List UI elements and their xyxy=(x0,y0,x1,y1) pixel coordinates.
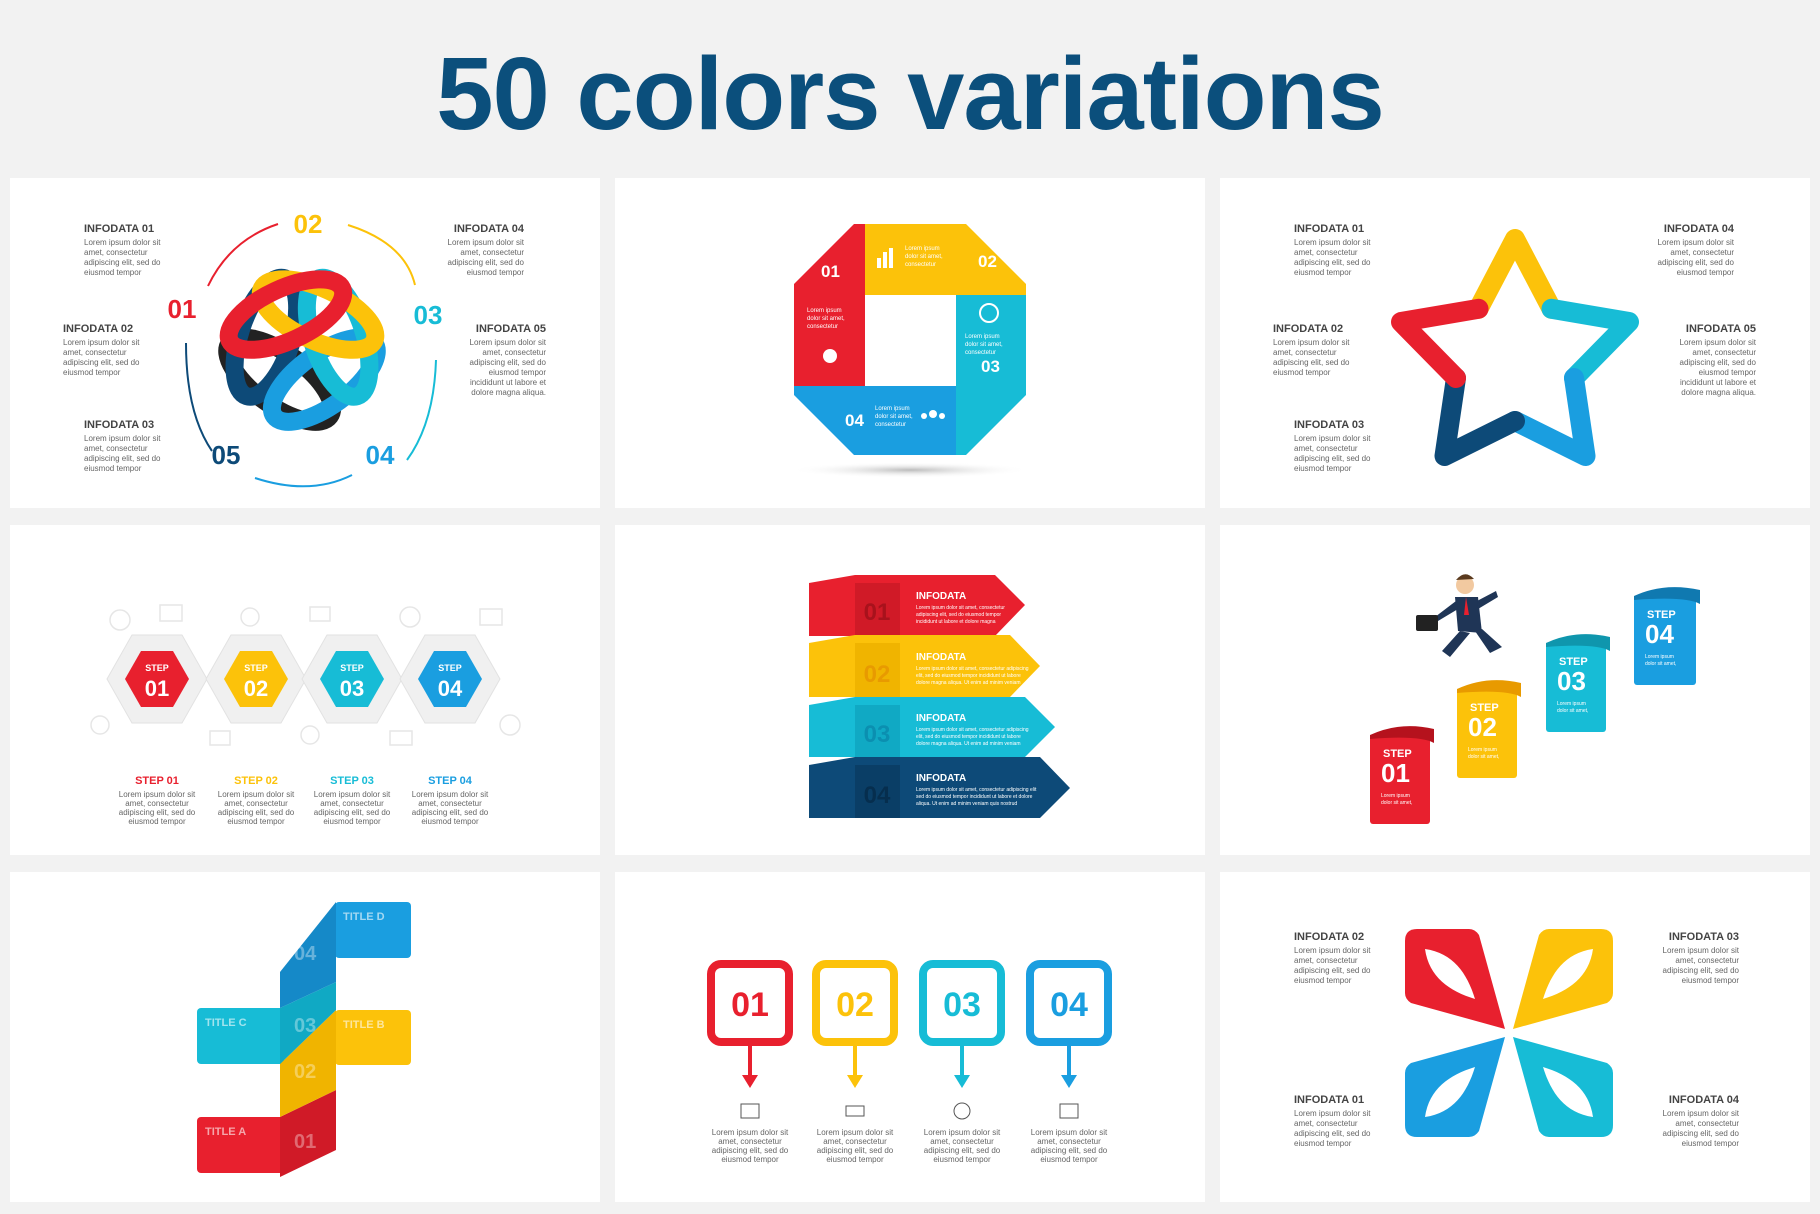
panel: ring infographic: Lorem ipsum dolor sit xyxy=(448,238,525,247)
panel: four petals: INFODATA 01 xyxy=(1294,1094,1364,1106)
hexagons: STEP xyxy=(438,663,462,673)
panel: pins: 02 xyxy=(836,986,874,1024)
hexagons: STEP xyxy=(340,663,364,673)
panel: octagon: dolor sit amet, xyxy=(965,342,1003,348)
step captions: eiusmod tempor xyxy=(128,817,186,826)
panel: pins xyxy=(615,872,1205,1202)
text blocks: Lorem ipsum dolor sit xyxy=(63,338,140,347)
panel: running man steps: 03 xyxy=(1557,666,1586,696)
panel: four petals: Lorem ipsum dolor sit xyxy=(1294,946,1371,955)
text blocks: INFODATA 03 xyxy=(84,419,154,431)
panel: 3D arrows: elit, sed do eiusmod tempor incididunt ut labore xyxy=(916,734,1021,740)
panel: star: INFODATA 02 xyxy=(1273,323,1343,335)
panel: star: amet, consectetur xyxy=(1294,248,1358,257)
hexagons: 02 xyxy=(244,676,268,701)
panel: 3D arrows: INFODATA xyxy=(916,713,966,724)
panel: pins: eiusmod tempor xyxy=(933,1155,991,1164)
panel: four petals: INFODATA 02 xyxy=(1294,931,1364,943)
panel: star: INFODATA 01 xyxy=(1294,223,1364,235)
title: 50 colors variations xyxy=(436,36,1384,151)
panel: four petals: adipiscing elit, sed do xyxy=(1294,1129,1371,1138)
panel: four petals: INFODATA 03 xyxy=(1669,931,1739,943)
panel: four petals: amet, consectetur xyxy=(1675,1119,1739,1128)
panel: ring infographic: INFODATA 05 xyxy=(476,323,546,335)
step captions: eiusmod tempor xyxy=(323,817,381,826)
panel: 3D arrows xyxy=(615,525,1205,855)
panel: pins: 03 xyxy=(943,986,981,1024)
panel: staircase titles xyxy=(10,872,600,1202)
panel: four petals: amet, consectetur xyxy=(1294,956,1358,965)
step captions: Lorem ipsum dolor sit xyxy=(314,790,391,799)
panel: running man steps: Lorem ipsum xyxy=(1381,793,1410,799)
panel: 3D arrows: dolore magna aliqua. Ut enim ad minim veniam xyxy=(916,680,1020,686)
panel: running man steps: STEP xyxy=(1383,748,1412,760)
panel: star: INFODATA 03 xyxy=(1294,419,1364,431)
step captions: amet, consectetur xyxy=(320,799,384,808)
icon: running businessman xyxy=(1416,574,1502,657)
panel: star: adipiscing elit, sed do xyxy=(1658,258,1735,267)
panel: pins: amet, consectetur xyxy=(1037,1137,1101,1146)
panel: pins: Lorem ipsum dolor sit xyxy=(924,1128,1001,1137)
panel: octagon: dolor sit amet, xyxy=(807,316,845,322)
panel: star: adipiscing elit, sed do xyxy=(1273,358,1350,367)
panel: running man steps: Lorem ipsum xyxy=(1468,747,1497,753)
panel: star: adipiscing elit, sed do xyxy=(1680,358,1757,367)
text blocks: Lorem ipsum dolor sit xyxy=(84,434,161,443)
octagon labels: 02 xyxy=(978,252,997,271)
hexagons: 03 xyxy=(340,676,364,701)
panel: pins: eiusmod tempor xyxy=(826,1155,884,1164)
panel: running man steps: STEP xyxy=(1559,656,1588,668)
text blocks: adipiscing elit, sed do xyxy=(84,258,161,267)
panel: pins: Lorem ipsum dolor sit xyxy=(817,1128,894,1137)
panel: running man steps: dolor sit amet, xyxy=(1468,754,1499,760)
panel: pins: adipiscing elit, sed do xyxy=(712,1146,789,1155)
step captions: amet, consectetur xyxy=(125,799,189,808)
panel: pins: eiusmod tempor xyxy=(721,1155,779,1164)
panel: octagon: consectetur xyxy=(905,262,936,268)
panel: running man steps: 04 xyxy=(1645,619,1674,649)
panel: octagon: Lorem ipsum xyxy=(905,246,940,252)
panel: star: Lorem ipsum dolor sit xyxy=(1273,338,1350,347)
panel: octagon: consectetur xyxy=(875,422,906,428)
arrow rows xyxy=(809,575,1070,818)
step captions: adipiscing elit, sed do xyxy=(119,808,196,817)
text blocks xyxy=(63,223,161,473)
panel: 3D arrows: INFODATA xyxy=(916,652,966,663)
panel: star: eiusmod tempor xyxy=(1294,464,1352,473)
panel: running man steps: dolor sit amet, xyxy=(1645,661,1676,667)
panel: running man steps: Lorem ipsum xyxy=(1557,701,1586,707)
pin markers xyxy=(711,964,1108,1042)
panel: staircase titles: TITLE D xyxy=(343,911,385,923)
panel: running man steps: dolor sit amet, xyxy=(1381,800,1412,806)
petals xyxy=(1405,929,1613,1137)
panel: 3D arrows: adipiscing elit, sed do eiusmod tempor xyxy=(916,612,1001,618)
panel: 3D arrows: Lorem ipsum dolor sit amet, consectetur adipiscing xyxy=(916,666,1029,672)
hexagons: 01 xyxy=(145,676,169,701)
title boxes xyxy=(197,902,411,1173)
panel: pins: amet, consectetur xyxy=(823,1137,887,1146)
panel: four petals: eiusmod tempor xyxy=(1294,1139,1352,1148)
icons xyxy=(823,248,998,419)
panel: 3D arrows: INFODATA xyxy=(916,591,966,602)
panel: ring infographic xyxy=(10,178,600,508)
step numbers xyxy=(168,209,442,470)
panel: four petals: adipiscing elit, sed do xyxy=(1662,966,1740,975)
text blocks: eiusmod tempor xyxy=(84,464,142,473)
doodle background xyxy=(91,605,520,745)
step captions: adipiscing elit, sed do xyxy=(412,808,489,817)
text blocks: amet, consectetur xyxy=(84,248,148,257)
panel: octagon: consectetur xyxy=(965,350,996,356)
step captions: STEP 02 xyxy=(234,775,278,787)
panel: four petals: eiusmod tempor xyxy=(1294,976,1352,985)
panel: staircase titles: 01 xyxy=(294,1131,316,1153)
text blocks: INFODATA 01 xyxy=(84,223,154,235)
panel: pins: amet, consectetur xyxy=(930,1137,994,1146)
text blocks: eiusmod tempor xyxy=(84,268,142,277)
panel: pins: adipiscing elit, sed do xyxy=(924,1146,1001,1155)
step numbers: 01 xyxy=(168,294,196,324)
panel: staircase titles: TITLE A xyxy=(205,1126,246,1138)
panel: ring infographic: dolore magna aliqua. xyxy=(471,388,546,397)
step numbers: 02 xyxy=(294,209,322,239)
arrows around xyxy=(186,224,436,486)
panel: pins: 04 xyxy=(1050,986,1088,1024)
step numbers: 05 xyxy=(212,440,240,470)
panel: ring infographic: eiusmod tempor xyxy=(467,268,524,277)
panel: four petals: Lorem ipsum dolor sit xyxy=(1294,1109,1371,1118)
ring knot xyxy=(214,265,390,437)
step captions: amet, consectetur xyxy=(418,799,482,808)
panel: four petals xyxy=(1220,872,1810,1202)
panel: four petals: Lorem ipsum dolor sit xyxy=(1663,946,1740,955)
panel: four petals: adipiscing elit, sed do xyxy=(1294,966,1371,975)
panel: four petals: amet, consectetur xyxy=(1294,1119,1358,1128)
panel: star: dolore magna aliqua. xyxy=(1681,388,1756,397)
panel: star: amet, consectetur xyxy=(1294,444,1358,453)
step captions: STEP 03 xyxy=(330,775,374,787)
panel: 3D arrows: Lorem ipsum dolor sit amet, consectetur adipiscing xyxy=(916,727,1029,733)
panel: pins: adipiscing elit, sed do xyxy=(817,1146,894,1155)
panel: staircase titles: TITLE C xyxy=(205,1017,247,1029)
panel: 3D arrows: incididunt ut labore et dolore magna xyxy=(916,619,996,625)
text blocks: eiusmod tempor xyxy=(63,368,121,377)
text blocks: INFODATA 02 xyxy=(63,323,133,335)
panel: star: Lorem ipsum dolor sit xyxy=(1680,338,1757,347)
panel: staircase titles: 03 xyxy=(294,1015,316,1037)
hexagons: STEP xyxy=(145,663,169,673)
panel: pins: adipiscing elit, sed do xyxy=(1031,1146,1108,1155)
panel: star: eiusmod tempor xyxy=(1294,268,1352,277)
step captions: amet, consectetur xyxy=(224,799,288,808)
panel: 3D arrows: elit, sed do eiusmod tempor incididunt ut labore xyxy=(916,673,1021,679)
panel: staircase titles: TITLE B xyxy=(343,1019,385,1031)
panel: pins: Lorem ipsum dolor sit xyxy=(712,1128,789,1137)
panel: four petals: INFODATA 04 xyxy=(1669,1094,1740,1106)
panel: 3D arrows: 02 xyxy=(864,661,890,688)
octagon labels: 01 xyxy=(821,262,840,281)
panel: octagon: Lorem ipsum xyxy=(965,334,1000,340)
panel: ring infographic: adipiscing elit, sed do xyxy=(470,358,547,367)
panel: octagon: Lorem ipsum xyxy=(807,308,842,314)
step numbers: 03 xyxy=(414,300,442,330)
panel: running man steps: 02 xyxy=(1468,712,1497,742)
panel: ring infographic: eiusmod tempor xyxy=(489,368,546,377)
panel: running man steps: STEP xyxy=(1470,702,1499,714)
panel: octagon: consectetur xyxy=(807,324,838,330)
panel: octagon: Lorem ipsum xyxy=(875,406,910,412)
octagon labels xyxy=(821,252,1000,430)
panel: hexagon steps xyxy=(10,525,600,855)
text blocks: adipiscing elit, sed do xyxy=(63,358,140,367)
panel: octagon: dolor sit amet, xyxy=(905,254,943,260)
octagon labels: 03 xyxy=(981,357,1000,376)
panel: 3D arrows: aliqua. Ut enim ad minim veniam quis nostrud xyxy=(916,801,1017,807)
panel: 3D arrows: dolore magna aliqua. Ut enim ad minim veniam xyxy=(916,741,1020,747)
diagonal strip xyxy=(280,902,336,1177)
panel: star: Lorem ipsum dolor sit xyxy=(1658,238,1735,247)
panel: running man steps: STEP xyxy=(1647,609,1676,621)
panel: star: Lorem ipsum dolor sit xyxy=(1294,238,1371,247)
panel: pins: 01 xyxy=(731,986,769,1024)
panel: star xyxy=(1220,178,1810,508)
panel: 3D arrows: 01 xyxy=(864,599,890,626)
panel: star: adipiscing elit, sed do xyxy=(1294,454,1371,463)
panel: running man steps xyxy=(1220,525,1810,855)
hexagons xyxy=(107,635,500,723)
hexagons: 04 xyxy=(438,676,463,701)
panel: ring infographic: Lorem ipsum dolor sit xyxy=(470,338,547,347)
panel: star: incididunt ut labore et xyxy=(1680,378,1757,387)
panel: 3D arrows: 03 xyxy=(864,721,890,748)
panel: pins: Lorem ipsum dolor sit xyxy=(1031,1128,1108,1137)
panel: ring infographic: INFODATA 04 xyxy=(454,223,525,235)
panel: four petals: eiusmod tempor xyxy=(1682,1139,1739,1148)
octagon labels: 04 xyxy=(845,411,864,430)
panel: ring infographic: amet, consectetur xyxy=(460,248,524,257)
panel: ring infographic: incididunt ut labore et xyxy=(470,378,547,387)
panel: 3D arrows: Lorem ipsum dolor sit amet, consectetur xyxy=(916,605,1005,611)
step captions: adipiscing elit, sed do xyxy=(218,808,295,817)
panel: octagon xyxy=(615,178,1205,508)
panel: star: eiusmod tempor xyxy=(1273,368,1331,377)
text blocks: amet, consectetur xyxy=(63,348,127,357)
step captions: Lorem ipsum dolor sit xyxy=(119,790,196,799)
octagon segments xyxy=(794,224,1026,455)
panel: staircase titles: 02 xyxy=(294,1061,316,1083)
panel: star: amet, consectetur xyxy=(1670,248,1734,257)
step numbers: 04 xyxy=(366,440,395,470)
panel: star: adipiscing elit, sed do xyxy=(1294,258,1371,267)
panel: star: eiusmod tempor xyxy=(1677,268,1734,277)
panel: four petals: Lorem ipsum dolor sit xyxy=(1663,1109,1740,1118)
text blocks: amet, consectetur xyxy=(84,444,148,453)
step captions: STEP 01 xyxy=(135,775,179,787)
hexagons: STEP xyxy=(244,663,268,673)
panel: ring infographic: amet, consectetur xyxy=(482,348,546,357)
panel: pins: eiusmod tempor xyxy=(1040,1155,1098,1164)
step captions: eiusmod tempor xyxy=(421,817,479,826)
panel: star: eiusmod tempor xyxy=(1699,368,1756,377)
panel: star: amet, consectetur xyxy=(1692,348,1756,357)
panel: pins: amet, consectetur xyxy=(718,1137,782,1146)
star ribbon xyxy=(1401,239,1629,456)
panel: four petals: adipiscing elit, sed do xyxy=(1662,1129,1740,1138)
step captions: STEP 04 xyxy=(428,775,473,787)
text blocks: adipiscing elit, sed do xyxy=(84,454,161,463)
panel: 3D arrows: INFODATA xyxy=(916,773,966,784)
panel: star: INFODATA 05 xyxy=(1686,323,1756,335)
panel: 3D arrows: Lorem ipsum dolor sit amet, consectetur adipiscing elit xyxy=(916,787,1037,793)
step captions: Lorem ipsum dolor sit xyxy=(412,790,489,799)
panel: ring infographic: adipiscing elit, sed do xyxy=(448,258,525,267)
panel: star: Lorem ipsum dolor sit xyxy=(1294,434,1371,443)
panel: running man steps: dolor sit amet, xyxy=(1557,708,1588,714)
icons xyxy=(741,1103,1078,1119)
panel: four petals: amet, consectetur xyxy=(1675,956,1739,965)
panel: running man steps: Lorem ipsum xyxy=(1645,654,1674,660)
step cards xyxy=(1370,587,1700,824)
panel: four petals: eiusmod tempor xyxy=(1682,976,1739,985)
text blocks: Lorem ipsum dolor sit xyxy=(84,238,161,247)
step captions: eiusmod tempor xyxy=(227,817,285,826)
panel: star: amet, consectetur xyxy=(1273,348,1337,357)
step captions xyxy=(119,775,489,826)
step captions: Lorem ipsum dolor sit xyxy=(218,790,295,799)
step captions: adipiscing elit, sed do xyxy=(314,808,391,817)
panel: octagon: dolor sit amet, xyxy=(875,414,913,420)
panel: star: INFODATA 04 xyxy=(1664,223,1735,235)
panel: 3D arrows: 04 xyxy=(864,782,891,809)
panel: 3D arrows: sed do eiusmod tempor incididunt ut labore et dolore xyxy=(916,794,1033,800)
panel: staircase titles: 04 xyxy=(294,943,317,965)
panel: running man steps: 01 xyxy=(1381,758,1410,788)
